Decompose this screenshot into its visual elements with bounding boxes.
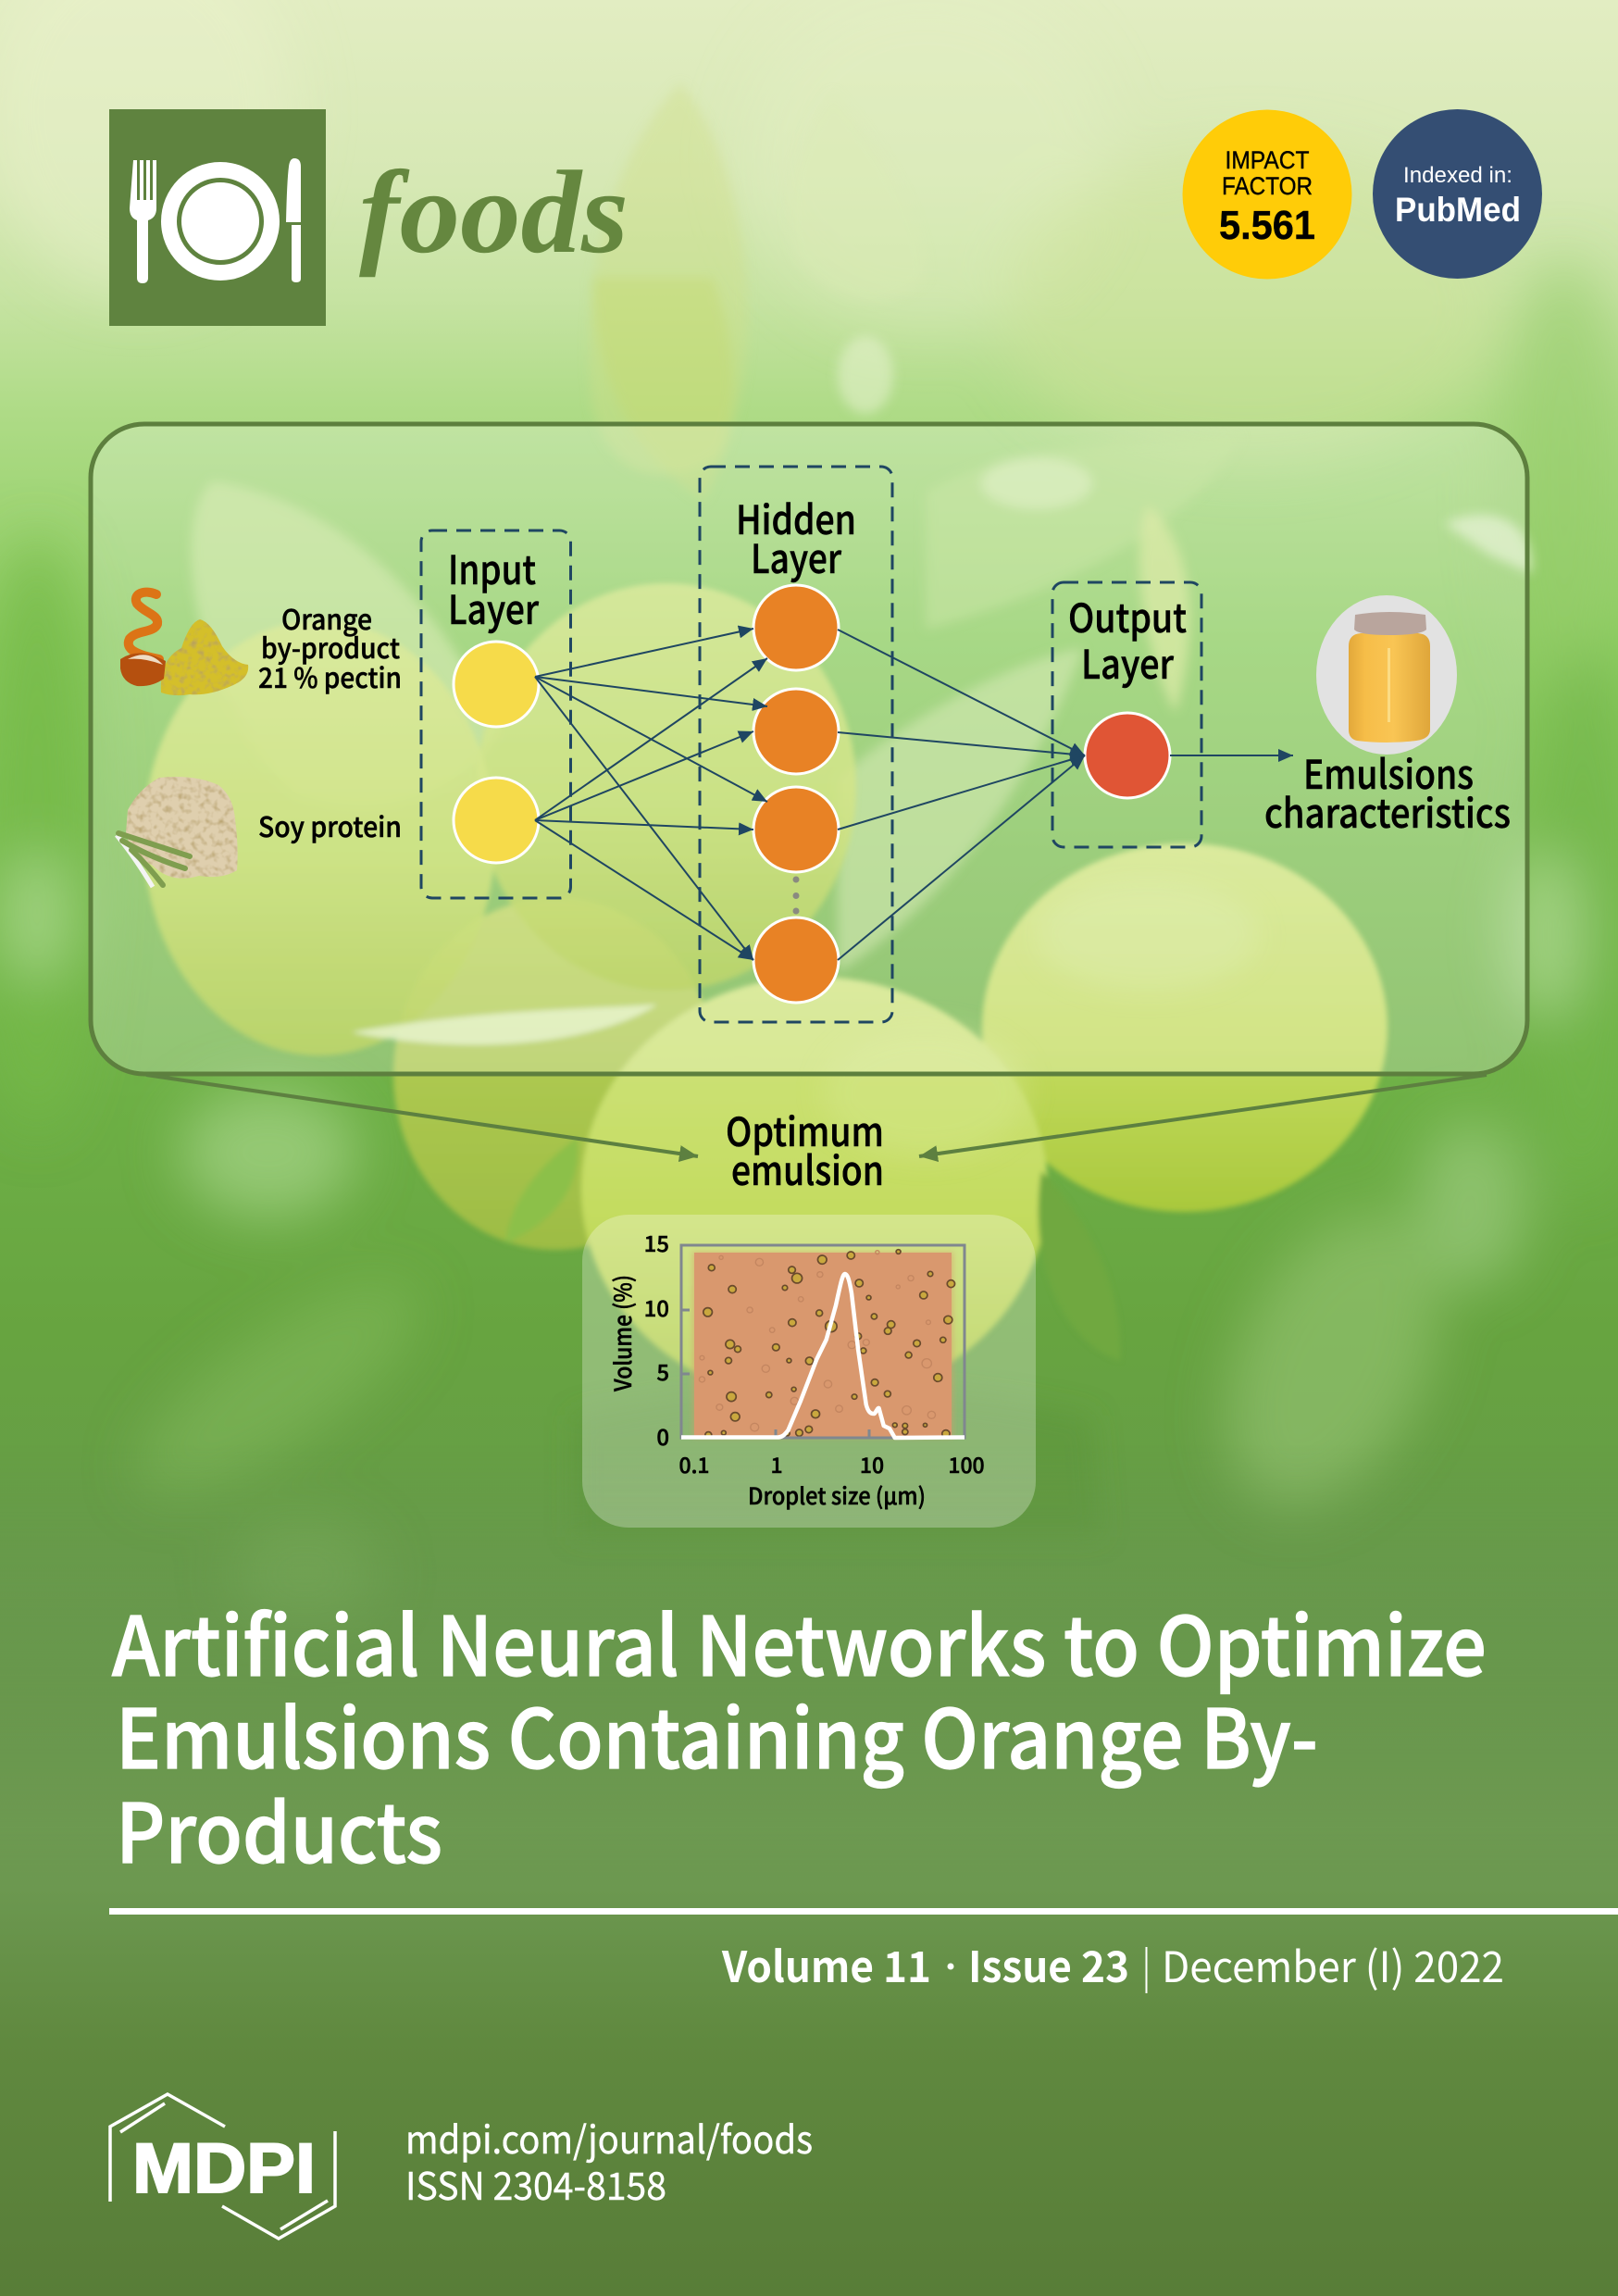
hidden layer: Layer bbox=[751, 528, 841, 585]
volume and issue line: Volume 11 bbox=[721, 1934, 931, 1995]
label: optimum emulsion: Optimum bbox=[726, 1101, 884, 1158]
article title bbox=[112, 1582, 1487, 1887]
chart axes frame bbox=[681, 1245, 965, 1438]
label: orange by-product: by-product bbox=[261, 626, 400, 667]
micrograph of emulsion droplets bbox=[692, 1250, 955, 1438]
input layer: Input bbox=[448, 539, 536, 596]
panel: neural network bbox=[91, 424, 1527, 1074]
y axis tick labels: 5 bbox=[656, 1354, 669, 1387]
x axis tick labels bbox=[678, 1448, 985, 1479]
impact factor badge: 5.561 bbox=[1219, 203, 1315, 248]
icon: fork bbox=[130, 160, 156, 283]
PubMed badge: PubMed bbox=[1395, 191, 1521, 229]
y axis tick labels: 15 bbox=[644, 1226, 669, 1258]
label: orange by-product: Orange bbox=[281, 597, 372, 638]
icon: orange peel and pectin powder bbox=[120, 593, 248, 695]
journal URL and ISSN: mdpi.com/journal/foods bbox=[405, 2109, 813, 2165]
hidden layer bbox=[700, 467, 892, 1022]
panel: droplet size chart bbox=[582, 1215, 1036, 1528]
output layer bbox=[1052, 582, 1201, 847]
label: emulsions characteristics: Emulsions bbox=[1303, 743, 1474, 801]
impact factor badge: IMPACT bbox=[1226, 146, 1309, 174]
impact factor badge: FACTOR bbox=[1222, 172, 1313, 200]
y axis tick labels: 10 bbox=[644, 1291, 669, 1323]
y axis tick labels bbox=[644, 1226, 669, 1452]
droplet size curve bbox=[681, 1274, 965, 1438]
label: optimum emulsion bbox=[726, 1101, 884, 1197]
journal logo: plate and cutlery bbox=[109, 109, 326, 326]
label: soy protein: Soy protein bbox=[258, 805, 402, 845]
label: optimum emulsion: emulsion bbox=[731, 1140, 884, 1197]
icon: knife bbox=[286, 158, 301, 282]
icon: plate bbox=[161, 162, 280, 281]
MDPI logo: MDPI bbox=[132, 2129, 316, 2208]
output layer: Output bbox=[1068, 587, 1187, 644]
MDPI logo bbox=[110, 2094, 335, 2239]
x axis tick labels: 100 bbox=[948, 1448, 985, 1479]
output layer: Layer bbox=[1081, 633, 1174, 691]
label: orange by-product: 21 % pectin bbox=[258, 655, 402, 696]
article title: Artificial Neural Networks to Optimize bbox=[112, 1582, 1487, 1700]
input layer bbox=[421, 530, 570, 898]
PubMed badge: Indexed in: bbox=[1403, 163, 1512, 188]
icon: soy protein and beans bbox=[117, 777, 238, 887]
label: emulsions characteristics: characteristics bbox=[1264, 782, 1511, 840]
x axis tick labels: 0.1 bbox=[678, 1448, 710, 1479]
y axis title: Volume (%) bbox=[605, 1275, 639, 1392]
network connection arrows bbox=[535, 629, 1293, 960]
y axis tick labels: 0 bbox=[656, 1419, 669, 1452]
x axis tick labels: 1 bbox=[770, 1448, 783, 1479]
volume and issue line: Issue 23 bbox=[968, 1934, 1129, 1995]
impact factor badge bbox=[1183, 109, 1351, 280]
volume and issue line: December (I) 2022 bbox=[1162, 1934, 1504, 1995]
label: emulsions characteristics bbox=[1264, 743, 1511, 840]
journal URL and ISSN bbox=[405, 2109, 813, 2211]
journal name: foods bbox=[359, 146, 629, 278]
icon: emulsion jar bbox=[1316, 595, 1457, 755]
hidden layer: Hidden bbox=[736, 489, 856, 546]
journal URL and ISSN: ISSN 2304-8158 bbox=[405, 2155, 666, 2211]
volume and issue line bbox=[721, 1934, 1504, 1995]
arrows to optimum emulsion bbox=[146, 1075, 1487, 1156]
article title: Emulsions Containing Orange By- bbox=[116, 1675, 1318, 1792]
divider rule bbox=[109, 1908, 1618, 1915]
x axis title: Droplet size (µm) bbox=[748, 1479, 926, 1512]
x axis tick labels: 10 bbox=[860, 1448, 884, 1479]
article title: Products bbox=[116, 1769, 442, 1887]
input layer: Layer bbox=[448, 579, 539, 636]
PubMed badge bbox=[1373, 109, 1542, 279]
label: orange by-product bbox=[258, 597, 402, 696]
